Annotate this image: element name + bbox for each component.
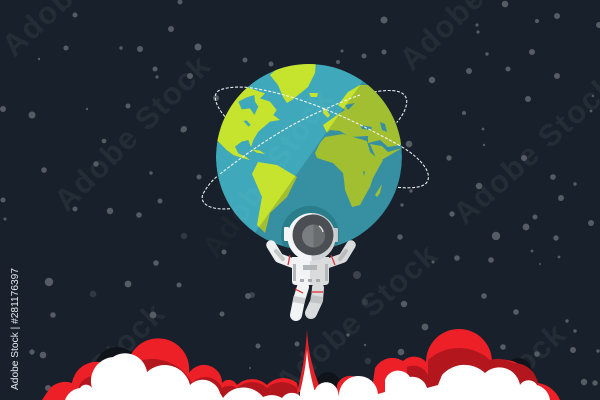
dark red clouds [78,348,538,400]
globe [216,64,402,248]
astronaut [271,213,351,315]
arm bands [288,255,335,265]
north america [217,86,280,160]
legs [296,287,303,315]
watermark: Stock [82,295,172,385]
torso [292,257,310,285]
continents [217,64,402,233]
cuba [252,149,265,154]
chest panel [303,265,317,270]
rocket flame [297,329,322,392]
visor [292,214,334,256]
knee bands [295,289,323,293]
ocean [216,64,402,250]
white clouds [65,353,550,400]
vertical stock credit: Adobe Stock | #281176397 [9,268,21,390]
knee pads [298,297,300,303]
arabia [370,144,402,161]
watermark: Adobe Stock [47,48,218,218]
arms [271,245,351,264]
orbit behind globe [202,87,428,209]
side strips [293,264,328,281]
ocean details [238,95,387,176]
orbit front [220,88,402,174]
cloud shadows [95,347,532,396]
watermark over globe: Adobe Stock [196,83,340,264]
south america [252,162,297,233]
watermark: Adobe Stock [268,236,445,400]
red clouds [42,329,560,400]
eurasia [323,85,402,147]
greenland [270,64,316,103]
islands [309,93,318,97]
globe shadow half [255,82,402,246]
africa [315,134,383,207]
helmet halo [281,206,339,248]
helmet [284,227,289,241]
